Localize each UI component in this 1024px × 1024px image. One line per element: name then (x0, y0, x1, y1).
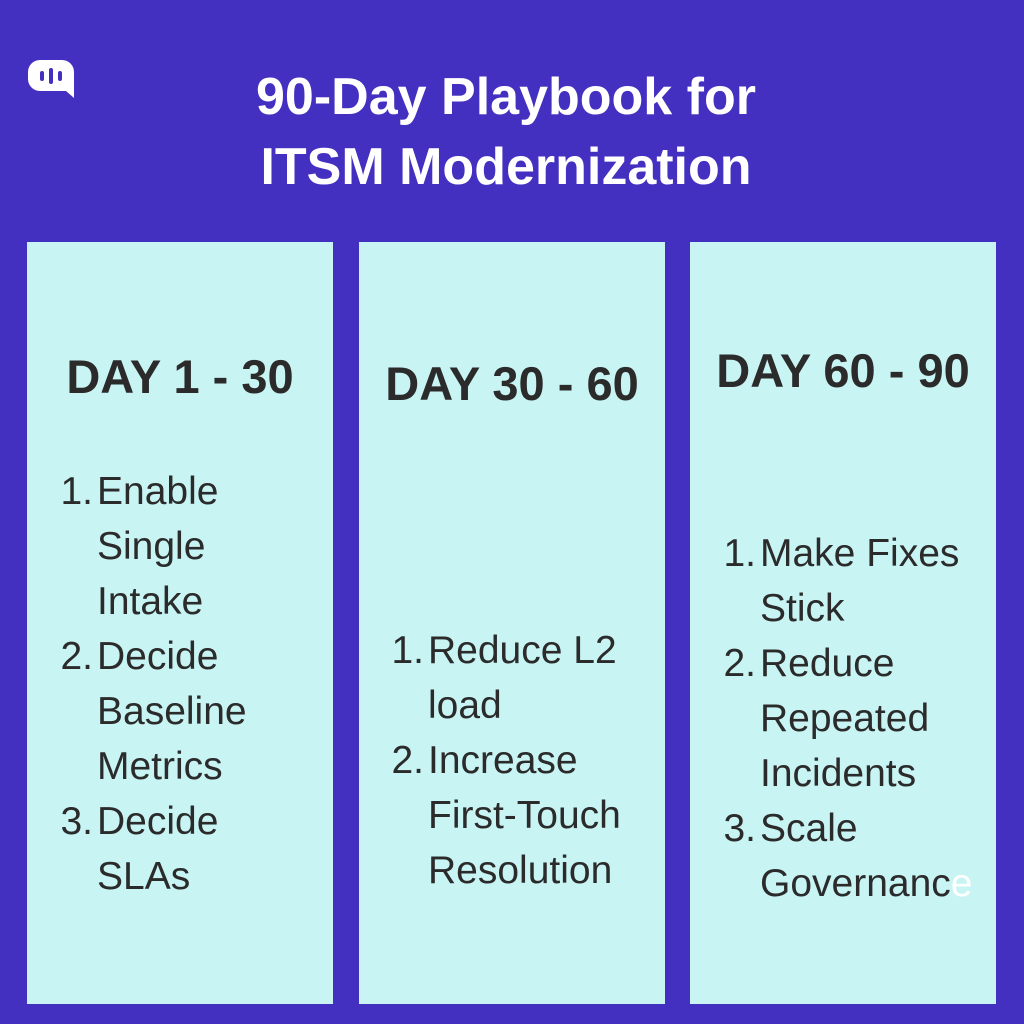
heading: day 30-60: DAY 30 - 60 (385, 357, 639, 410)
list: day 60-90 items: Incidents (760, 752, 916, 795)
list: day 1-30 items: Baseline (97, 690, 247, 733)
title: ITSM Modernization (260, 138, 752, 196)
list: day 60-90 items: Governance (760, 862, 972, 905)
list: day 60-90 items: Make Fixes (760, 532, 959, 575)
heading: day 60-90: DAY 60 - 90 (716, 344, 970, 397)
list: day 60-90 items: Reduce (760, 642, 894, 685)
list: day 60-90 items: Scale (760, 807, 858, 850)
list: day 30-60 items: 2. (391, 739, 424, 782)
list: day 1-30 items: 1. (60, 470, 93, 513)
list: day 30-60 items: Reduce L2 (428, 629, 617, 672)
list: day 60-90 items: 1. (723, 532, 756, 575)
list: day 1-30 items: Decide (97, 635, 218, 678)
panel: day 60-90 (690, 242, 996, 1004)
list: day 30-60 items (391, 629, 621, 892)
icon: chat logo (28, 60, 74, 98)
list: day 30-60 items: load (428, 684, 502, 727)
list: day 60-90 items: Repeated (760, 697, 929, 740)
list: day 1-30 items: Intake (97, 580, 203, 623)
list: day 1-30 items: Single (97, 525, 205, 568)
list: day 30-60 items: First-Touch (428, 794, 621, 837)
list: day 1-30 items: Decide (97, 800, 218, 843)
title (256, 68, 756, 196)
list: day 1-30 items: Metrics (97, 745, 223, 788)
list: day 60-90 items (723, 532, 972, 905)
heading: day 1-30: DAY 1 - 30 (66, 350, 294, 403)
list: day 1-30 items: 3. (60, 800, 93, 843)
list: day 30-60 items: Resolution (428, 849, 612, 892)
panel: day 1-30: SLAs (97, 855, 190, 898)
panel: day 1-30 (27, 242, 333, 1004)
list: day 1-30 items: Enable (97, 470, 218, 513)
panel: day 30-60 (359, 242, 665, 1004)
list: day 30-60 items: 1. (391, 629, 424, 672)
title: 90-Day Playbook for (256, 68, 756, 126)
list: day 1-30 items (60, 470, 247, 898)
list: day 60-90 items: 2. (723, 642, 756, 685)
list: day 60-90 items: Stick (760, 587, 845, 630)
list: day 30-60 items: Increase (428, 739, 578, 782)
list: day 60-90 items: 3. (723, 807, 756, 850)
list: day 1-30 items: 2. (60, 635, 93, 678)
